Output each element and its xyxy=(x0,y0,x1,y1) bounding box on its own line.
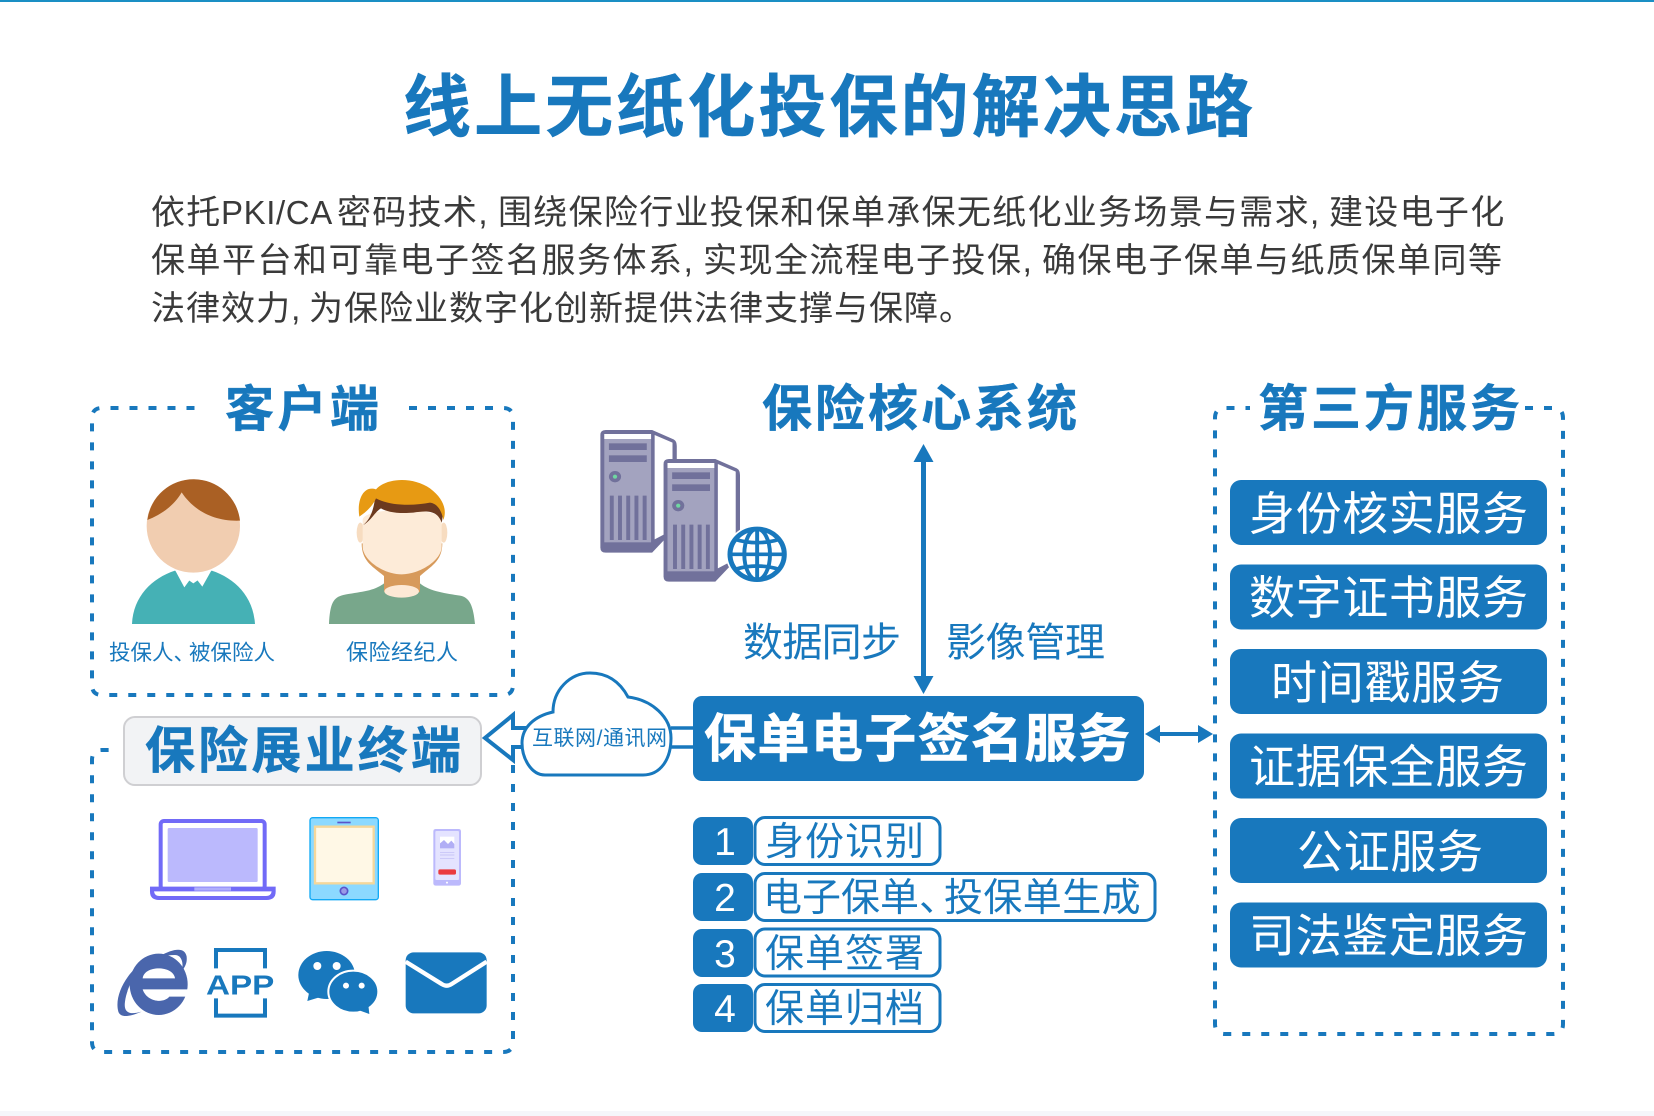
icon: broker person xyxy=(329,480,475,624)
intro text block xyxy=(151,194,1506,328)
icon: WeChat xyxy=(298,951,378,1014)
broker label: 保险经纪人 xyxy=(346,640,458,665)
intro text block: 为保险业数字化创新提供法律支撑与保障。 xyxy=(309,290,974,328)
label: image management: 影像管理 xyxy=(946,621,1105,665)
step 4: 4 xyxy=(714,988,736,1031)
icon: APP: APP xyxy=(206,969,274,1000)
intro text block: 确保电子保单与纸质保单同等 xyxy=(1042,242,1504,280)
step 2: 电子保单、 xyxy=(763,877,958,920)
intro text block: 法律效力, xyxy=(151,290,301,328)
icon: phone xyxy=(433,829,461,886)
icon: tablet xyxy=(310,818,378,900)
client heading: 客户端 xyxy=(225,383,379,437)
step 4: 保单归档 xyxy=(765,988,924,1031)
arrow: hollow arrow to terminals xyxy=(485,715,540,760)
intro text block: 依托 xyxy=(151,194,222,232)
arrow: signature service to third party xyxy=(1145,725,1213,743)
service: timestamp: 时间戳服务 xyxy=(1271,657,1504,709)
step 4 xyxy=(693,984,940,1032)
panel: third-party services xyxy=(1215,381,1563,1034)
panel: core insurance system xyxy=(600,381,1105,694)
intro text block: 建设电子化 xyxy=(1329,194,1506,232)
service: judicial appraisal: 司法鉴定服务 xyxy=(1249,910,1528,962)
title: 线上无纸化投保的解决思路 xyxy=(403,70,1253,146)
service: timestamp xyxy=(1230,649,1547,714)
icon: mail xyxy=(406,952,487,1013)
policyholder label: 被保险人 xyxy=(189,641,275,665)
step 2: 2 xyxy=(714,877,736,920)
step 3 xyxy=(693,929,940,977)
icon: APP xyxy=(206,950,274,1016)
icon: laptop xyxy=(150,821,276,900)
panel: insurance sales terminals xyxy=(92,717,513,1052)
intro text block: 实现全流程电子投保, xyxy=(703,242,1033,280)
step 2 xyxy=(693,873,1155,921)
service: evidence preservation: 证据保全服务 xyxy=(1249,741,1528,793)
core system heading: 保险核心系统 xyxy=(762,381,1077,437)
intro text block: PKI/CA xyxy=(221,194,333,231)
intro text block: 保单平台和可靠电子签名服务体系, xyxy=(151,242,694,280)
third-party heading: 第三方服务 xyxy=(1258,381,1520,437)
service: notarization: 公证服务 xyxy=(1297,826,1483,878)
intro text block: 密码技术, xyxy=(337,194,489,232)
step 3: 保单签署 xyxy=(765,933,924,976)
main box: policy e-signature service xyxy=(693,696,1144,781)
connector lines xyxy=(671,728,693,747)
icon: servers with globe xyxy=(600,430,789,584)
numbered list xyxy=(693,817,1155,1032)
policyholder label: 投保人、 xyxy=(109,641,195,665)
step 1: 身份识别 xyxy=(765,821,924,864)
service: notarization xyxy=(1230,818,1547,883)
icon: cloud network: 互联网/通讯网 xyxy=(532,727,667,750)
icon: policyholder person xyxy=(132,479,255,624)
terminals heading: 保险展业终端 xyxy=(145,723,461,779)
icon: cloud network xyxy=(522,673,671,775)
step 3: 3 xyxy=(714,933,736,976)
step 2: 投保单生成 xyxy=(944,877,1141,920)
intro text block: 围绕保险行业投保和保单承保无纸化业务场景与需求, xyxy=(498,194,1321,232)
label: data sync: 数据同步 xyxy=(743,621,901,665)
arrow: core system to signature service xyxy=(914,444,934,694)
main box: policy e-signature service: 保单电子签名服务 xyxy=(704,711,1130,769)
step 1 xyxy=(693,817,940,865)
icon: IE browser xyxy=(117,950,190,1016)
step 1: 1 xyxy=(714,821,736,864)
service: digital certificate: 数字证书服务 xyxy=(1249,572,1528,624)
service: identity verification: 身份核实服务 xyxy=(1249,488,1528,540)
panel: client xyxy=(92,383,513,695)
